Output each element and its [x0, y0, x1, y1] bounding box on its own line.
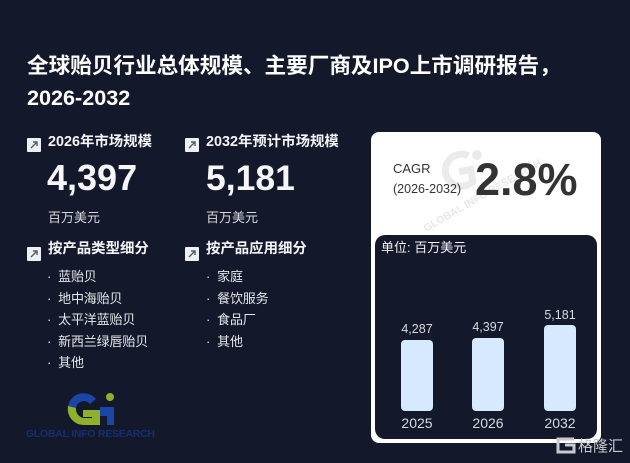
bar 2032: 2032: [544, 415, 576, 431]
list: product types: · 地中海贻贝: [47, 290, 122, 306]
title: 全球贻贝行业总体规模、主要厂商及IPO上市调研报告，: [27, 53, 561, 78]
text: CAGR label: (2026-2032): [393, 182, 461, 196]
bar 2026: [472, 320, 504, 431]
list: applications: · 家庭: [206, 269, 243, 284]
bar 2025: [401, 322, 433, 431]
icon: arrow product type: [27, 247, 41, 261]
panel: 2026 market size: [27, 134, 152, 225]
bar 2026: 4,397: [472, 320, 504, 334]
list: product types: · 其他: [47, 355, 84, 370]
unit: 2032: 百万美元: [206, 210, 258, 225]
text: Gelonghui: 格隆汇: [578, 438, 623, 455]
list: applications: · 食品厂: [206, 312, 256, 327]
panel: bar chart: [375, 235, 597, 439]
unit: 2026: 百万美元: [48, 210, 100, 225]
heading: product type: 按产品类型细分: [48, 241, 149, 257]
value: 2.8%: 2.8%: [475, 154, 578, 205]
logo: Global Info Research: [26, 393, 155, 440]
text: CAGR label: [393, 161, 461, 196]
list: product types: · 蓝贻贝: [47, 269, 97, 284]
list: applications: · 餐饮服务: [206, 290, 269, 306]
title: [27, 53, 561, 110]
icon: arrow 2032: [185, 138, 199, 152]
bar 2026: 2026: [472, 415, 504, 431]
bar 2032: [544, 308, 576, 431]
value: 4,397: 4,397: [47, 157, 137, 198]
title: 2026-2032: [27, 85, 130, 110]
list: applications: · 其他: [206, 334, 243, 348]
panel: 2032 forecast market size: [185, 134, 339, 225]
bar 2032: 5,181: [544, 308, 576, 322]
heading: application: 按产品应用细分: [206, 241, 307, 257]
panel: CAGR card: [371, 132, 601, 443]
list: product types: · 太平洋蓝贻贝: [47, 312, 135, 327]
list: applications: [206, 269, 269, 348]
icon: Gelonghui logo: [556, 438, 576, 454]
icon: arrow application: [185, 247, 199, 261]
panel: by product type: [27, 240, 149, 370]
heading: 2026 market size: 2026年市场规模: [48, 134, 152, 150]
bar 2025: 2025: [401, 415, 433, 431]
bar 2025: 4,287: [401, 322, 433, 336]
icon: arrow 2026: [27, 138, 41, 152]
bar chart: [401, 308, 576, 431]
panel: by application: [185, 240, 307, 348]
watermark: Gelonghui brand: [556, 438, 623, 455]
list: product types: [47, 269, 148, 370]
text: CAGR label: CAGR: [393, 161, 431, 176]
list: product types: · 新西兰绿唇贻贝: [47, 334, 148, 348]
logo: Global Info Research: GLOBAL INFO RESEARCH: [26, 428, 155, 440]
heading: 2032 forecast: 2032年预计市场规模: [206, 134, 339, 150]
value: 5,181: 5,181: [206, 158, 295, 198]
watermark: logo: GLOBAL INFO RESEARCH: [422, 157, 544, 235]
text: chart unit: 单位: 百万美元: [381, 240, 466, 255]
